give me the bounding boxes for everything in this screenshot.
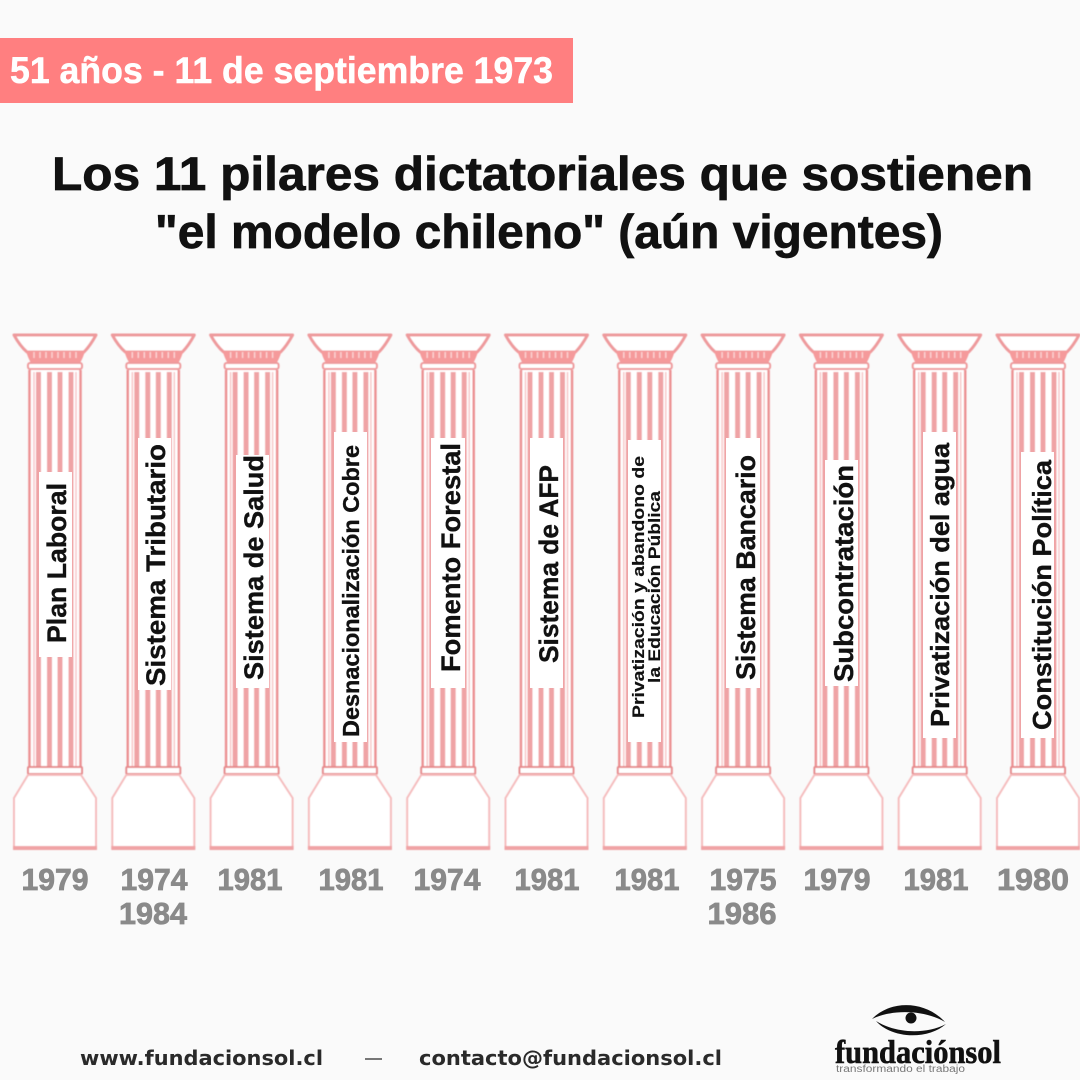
pillar: Plan Laboral: Plan Laboral — [42, 483, 72, 643]
pillar: Privatización del agua: Privatización del agua — [925, 442, 955, 727]
years row: 1984 — [119, 896, 188, 931]
pillar: Sistema de AFP: Sistema de AFP — [534, 465, 564, 663]
years row: 1974 — [414, 862, 481, 897]
years row: 1975 — [710, 862, 776, 897]
pillar: Constitución Política — [996, 335, 1080, 848]
years row: 1981 — [904, 862, 968, 897]
years row: 1981 — [514, 862, 580, 897]
footer contact line: www.fundacionsol.cl — [80, 1046, 323, 1070]
years row: 1979 — [22, 862, 88, 897]
logo: fundaciónsol: fundaciónsol — [835, 1035, 1001, 1071]
footer contact line: contacto@fundacionsol.cl — [419, 1046, 722, 1070]
pillar: Fomento Forestal — [406, 335, 490, 848]
years row: 1981 — [614, 862, 680, 897]
pillar: Privatización y abandono de la Educación Pública — [603, 335, 687, 848]
logo: fundaciónsol: transformando el trabajo — [836, 1064, 966, 1075]
years row: 1981 — [318, 862, 384, 897]
title: Los 11 pilares dictatoriales que sostienen — [52, 147, 1033, 200]
years row — [22, 862, 1069, 931]
pillar: Sistema Bancario — [701, 335, 785, 848]
years row: 1980 — [997, 862, 1069, 897]
pillar: Sistema Tributario — [111, 335, 195, 848]
pillar: Fomento Forestal: Fomento Forestal — [436, 443, 466, 672]
years row: 1981 — [218, 862, 282, 897]
pillar: Desnacionalización Cobre — [308, 335, 392, 848]
pillar: Sistema de Salud: Sistema de Salud — [239, 455, 269, 680]
title — [52, 147, 1033, 258]
pillar: Sistema Bancario: Sistema Bancario — [731, 455, 761, 680]
pillar: Sistema de AFP — [504, 335, 588, 848]
pillar: Subcontratación — [799, 335, 883, 848]
pillar: Privatización del agua — [898, 335, 982, 848]
date banner — [0, 38, 573, 103]
footer contact line — [80, 1046, 722, 1070]
pillar: Privatización y abandono de la Educación Pública: la Educación Pública — [646, 490, 664, 683]
pillar: Sistema Tributario: Sistema Tributario — [141, 444, 171, 686]
years row: 1986 — [708, 896, 776, 931]
logo: fundaciónsol — [835, 1005, 1001, 1075]
pillar: Plan Laboral — [13, 335, 97, 848]
years row: 1979 — [804, 862, 870, 897]
title: "el modelo chileno" (aún vigentes) — [155, 205, 943, 258]
years row: 1974 — [120, 862, 188, 897]
pillar: Subcontratación: Subcontratación — [829, 465, 859, 682]
icon: eye — [872, 1005, 946, 1035]
pillar: Sistema de Salud — [210, 335, 294, 848]
pillar: Privatización y abandono de la Educación Pública: Privatización y abandono de — [630, 456, 648, 718]
pillar: Constitución Política: Constitución Política — [1027, 459, 1057, 730]
date banner: 51 años - 11 de septiembre 1973 — [10, 50, 553, 91]
pillar: Desnacionalización Cobre: Desnacionalización Cobre — [338, 445, 364, 737]
